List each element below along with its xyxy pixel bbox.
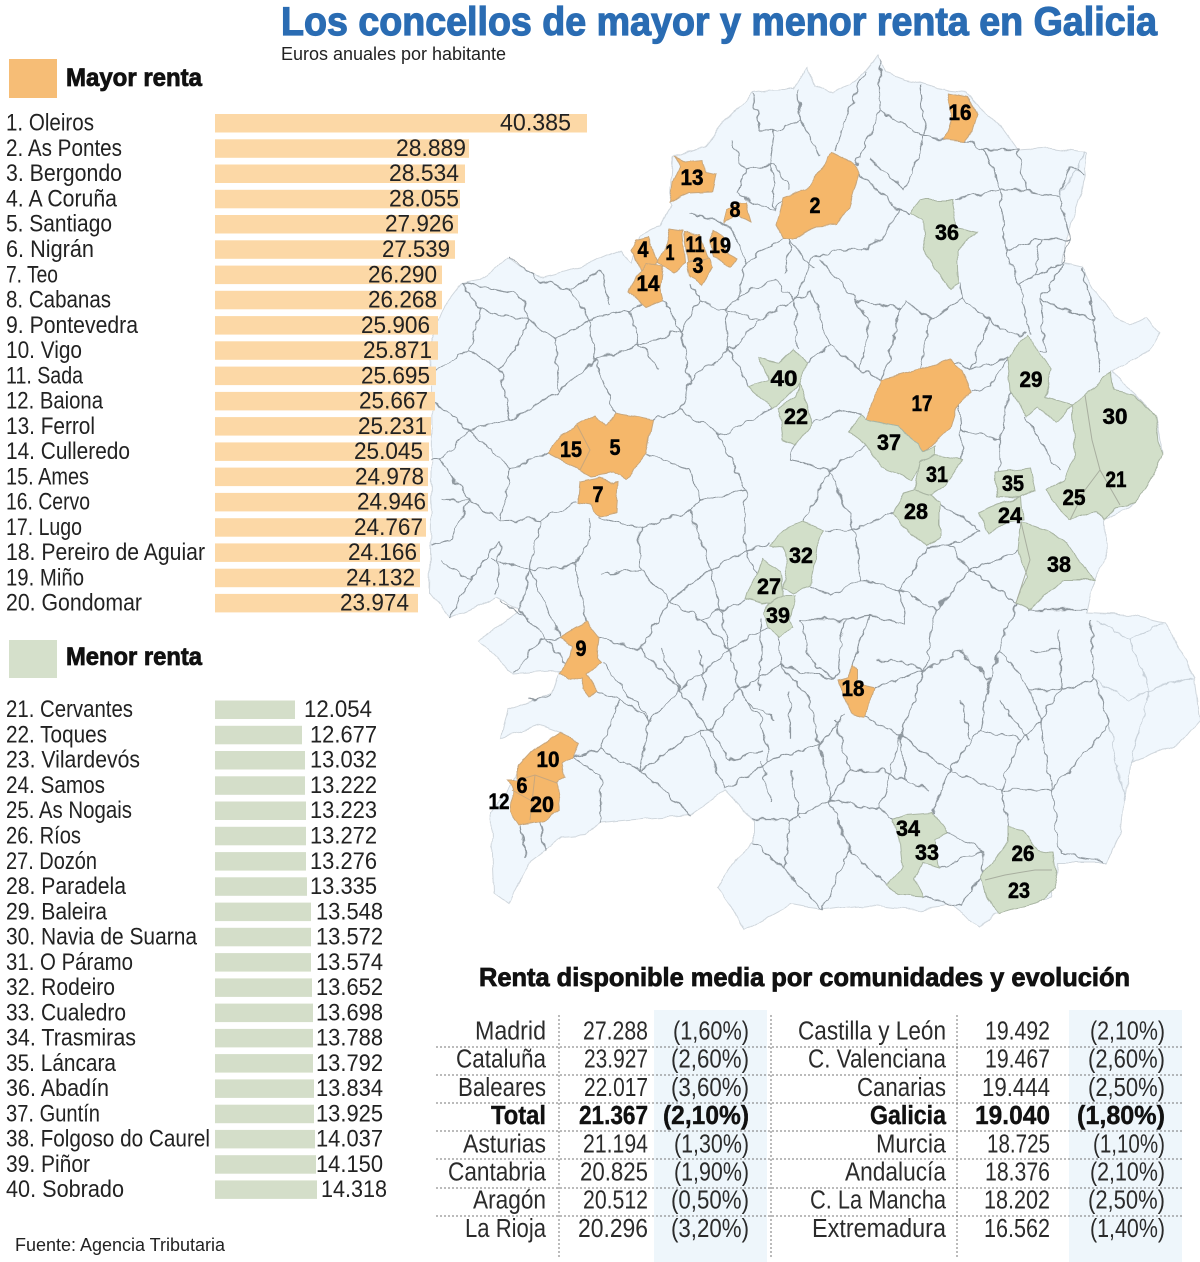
table right column: 18.376 [985, 1158, 1050, 1186]
map of Galicia [430, 55, 1200, 930]
bar chart: lowest income: 38. Folgoso do Caurel [6, 1126, 210, 1153]
table left column [448, 1018, 749, 1243]
bar chart: highest income: 18. Pereiro de Aguiar [6, 539, 205, 566]
map number labels: 27 [757, 574, 781, 599]
map number labels: 26 [1012, 841, 1034, 866]
bar chart: lowest income: 13.548 [316, 898, 383, 925]
map number labels: 21 [1106, 467, 1126, 492]
bar chart: lowest income: 13.792 [316, 1050, 383, 1077]
table left column: Cantabria [448, 1158, 547, 1186]
bar chart: highest income: 25.871 [363, 337, 432, 364]
bar chart: lowest income: 13.574 [316, 949, 383, 976]
bar chart: lowest income: 13.222 [310, 772, 377, 799]
municipality 17 [866, 360, 972, 453]
bar chart: lowest income: 37. Guntín [6, 1100, 100, 1127]
bar chart: highest income: 26.290 [368, 261, 437, 288]
bar chart: highest income: 9. Pontevedra [6, 312, 138, 339]
table right column: (2,10%) [1090, 1018, 1165, 1046]
municipalities 10, 6, 12 and 20 [507, 733, 579, 825]
municipality 38 [1016, 522, 1094, 610]
map number labels: 5 [610, 435, 620, 460]
map number labels: 39 [766, 603, 790, 628]
municipality 22 [778, 383, 812, 445]
map number labels: 28 [904, 499, 928, 524]
bar chart: highest income: 24.946 [357, 489, 426, 516]
map number labels: 38 [1047, 552, 1071, 577]
map number labels [488, 100, 1128, 903]
table right column: 19.467 [985, 1046, 1050, 1074]
bar chart: highest income: 25.695 [361, 362, 430, 389]
map number labels: 29 [1020, 367, 1042, 392]
table right column: C. Valenciana [808, 1046, 947, 1074]
bar chart: lowest income: 13.032 [310, 747, 377, 774]
table right column: (1,80%) [1077, 1102, 1165, 1130]
table left column: (1,60%) [673, 1018, 749, 1046]
legend: menor renta: Menor renta [66, 643, 203, 671]
subtitle: Euros anuales por habitante [281, 43, 506, 64]
table left column: 20.825 [580, 1158, 648, 1186]
municipality 28 [893, 490, 940, 547]
table right column: 16.562 [984, 1215, 1050, 1243]
table left column: Cataluña [456, 1046, 547, 1074]
bar chart: lowest income: 12.054 [304, 696, 372, 723]
table heading: Renta disponible media por comunidades y evolución [479, 962, 1130, 992]
title: Los concellos de mayor y menor renta en Galicia [281, 0, 1158, 44]
municipalities 26 and 23 [981, 827, 1057, 913]
table right column: (2,10%) [1090, 1158, 1165, 1186]
bar chart: lowest income: 34. Trasmiras [6, 1025, 136, 1052]
bar chart: highest income: 24.767 [354, 514, 423, 541]
panel: mayor renta [6, 59, 587, 617]
municipality 36 [910, 200, 977, 288]
bar chart: highest income: 27.539 [382, 236, 450, 263]
map number labels: 36 [935, 220, 959, 245]
map number labels: 8 [730, 197, 740, 222]
municipality 32 [771, 522, 825, 593]
bar chart: highest income: 25.667 [359, 388, 428, 415]
bar chart: lowest income: 13.925 [316, 1100, 383, 1127]
bar chart: lowest income: 39. Piñor [6, 1151, 90, 1178]
table left column: (1,30%) [674, 1130, 749, 1158]
municipality 27 [746, 560, 783, 603]
map number labels: 1 [666, 240, 674, 265]
table shaded columns [654, 1010, 1182, 1262]
highest income municipalities (orange) [507, 93, 977, 825]
map number labels: 17 [912, 391, 932, 416]
map number labels: 30 [1102, 404, 1128, 429]
bar chart: lowest income: 25. As Nogais [6, 797, 132, 824]
bar chart: highest income: 23.974 [340, 590, 409, 617]
bar chart: lowest income: 30. Navia de Suarna [6, 923, 197, 950]
bar chart: highest income: 7. Teo [6, 261, 58, 288]
table right column: 18.202 [984, 1187, 1050, 1215]
bar chart: highest income: 28.055 [389, 186, 459, 213]
map number labels: 12 [488, 789, 510, 814]
bar chart: highest income: 12. Baiona [6, 388, 103, 415]
map number labels: 19 [709, 233, 731, 258]
bar chart: lowest income: 36. Abadín [6, 1075, 109, 1102]
map number labels: 4 [638, 237, 649, 262]
map number labels: 32 [789, 543, 813, 568]
map number labels: 34 [896, 816, 921, 841]
table right column: Castilla y León [798, 1018, 946, 1046]
bar chart: highest income: 2. As Pontes [6, 135, 122, 162]
bar chart: highest income: 14. Culleredo [6, 438, 130, 465]
bar chart: highest income: 15. Ames [6, 463, 89, 490]
map number labels: 25 [1062, 485, 1086, 510]
map number labels: 40 [770, 366, 798, 391]
municipality 40 [749, 348, 806, 408]
legend: mayor renta: Mayor renta [66, 64, 203, 92]
table left column: (0,50%) [671, 1187, 749, 1215]
bar chart: lowest income: 33. Cualedro [6, 999, 126, 1026]
table left column: (1,90%) [674, 1158, 749, 1186]
bar chart: highest income: 28.889 [396, 135, 466, 162]
table right column: Canarias [857, 1074, 946, 1102]
municipalities 30, 21 and 25 [1045, 373, 1163, 520]
map number labels: 35 [1002, 471, 1024, 496]
bar chart: lowest income: 29. Baleira [6, 898, 107, 925]
bar chart: lowest income: 13.652 [316, 974, 383, 1001]
bar chart: highest income: 24.166 [348, 539, 417, 566]
municipality 8 [724, 203, 751, 223]
table left column: (2,10%) [663, 1102, 749, 1130]
municipality 24 [979, 498, 1023, 533]
table right column: (2,50%) [1088, 1187, 1165, 1215]
municipality 3 [687, 258, 712, 285]
bar chart: lowest income: 13.276 [310, 848, 377, 875]
bar chart: highest income: 19. Miño [6, 564, 84, 591]
municipality 4 [631, 237, 660, 272]
far-east light borders [1060, 153, 1195, 800]
table left column: 22.017 [584, 1074, 648, 1102]
table right column [798, 1018, 1165, 1243]
bar chart: highest income: 28.534 [389, 160, 459, 187]
municipality 11 [684, 232, 708, 262]
table right column: Andalucía [845, 1158, 947, 1186]
panel: menor renta [6, 640, 387, 1203]
map number labels: 11 [686, 232, 704, 257]
table left column: 20.512 [583, 1187, 648, 1215]
bar chart: highest income: 20. Gondomar [6, 590, 142, 617]
bar chart: highest income: 10. Vigo [6, 337, 82, 364]
table left column: Baleares [458, 1074, 546, 1102]
table right column: (1,10%) [1093, 1130, 1165, 1158]
map number labels: 15 [560, 437, 582, 462]
bar chart: lowest income: 13.223 [310, 797, 377, 824]
municipality 39 [763, 595, 795, 637]
bar chart: lowest income: 13.572 [316, 923, 383, 950]
municipality 31 [915, 455, 962, 495]
table right column: 19.492 [985, 1018, 1050, 1046]
municipality 19 [710, 230, 736, 267]
bar chart: lowest income: 13.698 [316, 999, 383, 1026]
bar chart: lowest income [6, 696, 387, 1203]
bar chart: highest income: 13. Ferrol [6, 413, 95, 440]
bar chart: lowest income: 28. Paradela [6, 873, 126, 900]
bar chart: highest income: 5. Santiago [6, 211, 112, 238]
bar chart: lowest income: 32. Rodeiro [6, 974, 115, 1001]
map number labels: 24 [998, 503, 1023, 528]
table left column: Madrid [475, 1018, 546, 1046]
land outline [430, 55, 1200, 930]
map number labels: 22 [784, 404, 808, 429]
map number labels: 2 [810, 193, 820, 218]
table right column: 19.444 [982, 1074, 1050, 1102]
bar chart: highest income: 11. Sada [6, 362, 83, 389]
municipality 37 [849, 415, 935, 480]
table dotted rules [436, 1015, 1182, 1258]
bar chart: lowest income: 40. Sobrado [6, 1176, 124, 1203]
table left column: 21.367 [579, 1102, 648, 1130]
bar chart: highest income: 27.926 [385, 211, 454, 238]
source note: Fuente: Agencia Tributaria [15, 1235, 226, 1255]
map number labels: 13 [680, 165, 704, 190]
bar chart: lowest income: 26. Ríos [6, 822, 81, 849]
bar chart: lowest income: 31. O Páramo [6, 949, 133, 976]
municipality 18 [839, 665, 874, 717]
table right column: (2,50%) [1088, 1074, 1165, 1102]
bar chart: highest income: 3. Bergondo [6, 160, 122, 187]
table right column: C. La Mancha [810, 1187, 947, 1215]
table right column: (1,40%) [1090, 1215, 1165, 1243]
table left column: (3,60%) [671, 1074, 749, 1102]
bar chart: lowest income: 12.677 [310, 721, 377, 748]
bar chart: highest income: 25.045 [354, 438, 423, 465]
table left column: (2,60%) [671, 1046, 749, 1074]
bar chart: lowest income: 27. Dozón [6, 848, 97, 875]
bar chart: lowest income: 24. Samos [6, 772, 105, 799]
municipality 9 [560, 622, 602, 697]
municipality 7 [578, 478, 618, 517]
table left column: Total [491, 1102, 546, 1130]
table left column: 27.288 [583, 1018, 648, 1046]
map number labels: 18 [842, 676, 864, 701]
table right column: 19.040 [975, 1102, 1050, 1130]
lowest income municipalities (green) [746, 200, 1163, 913]
table right column: 18.725 [987, 1130, 1050, 1158]
map number labels: 6 [516, 773, 528, 798]
municipality 1 [658, 228, 685, 272]
bar chart: highest income: 25.906 [361, 312, 430, 339]
inner borders of highlighted groups [985, 395, 1120, 880]
bar chart: highest income: 24.978 [355, 463, 424, 490]
map number labels: 3 [692, 253, 704, 278]
table left column: (3,20%) [671, 1215, 749, 1243]
table right column: Extremadura [812, 1215, 947, 1243]
bar chart: highest income: 25.231 [358, 413, 427, 440]
municipality 16 [945, 93, 977, 142]
table left column: La Rioja [465, 1215, 547, 1243]
bar chart: highest income: 24.132 [346, 564, 415, 591]
bar chart: lowest income: 14.150 [316, 1151, 383, 1178]
bar chart: highest income: 40.385 [500, 110, 571, 137]
map number labels: 33 [915, 840, 939, 865]
table left column: Asturias [463, 1130, 546, 1158]
bar chart: highest income: 26.268 [368, 286, 437, 313]
bar chart: lowest income: 13.335 [310, 873, 377, 900]
table left column: 21.194 [583, 1130, 648, 1158]
bar chart: highest income: 1. Oleiros [6, 110, 94, 137]
bar chart: lowest income: 13.272 [310, 822, 377, 849]
bar chart: highest income: 8. Cabanas [6, 286, 111, 313]
bar chart: highest income: 6. Nigrán [6, 236, 94, 263]
bar chart: highest income: 4. A Coruña [6, 186, 117, 213]
municipality 35 [995, 468, 1035, 498]
legend: mayor renta [9, 59, 203, 98]
bar chart: lowest income: 35. Láncara [6, 1050, 116, 1077]
map number labels: 37 [877, 430, 901, 455]
bar chart: lowest income: 13.788 [316, 1025, 383, 1052]
municipality 2 [776, 153, 859, 238]
legend: menor renta [9, 640, 203, 678]
map number labels: 31 [926, 462, 948, 487]
municipal borders [430, 60, 1110, 910]
table right column: (2,60%) [1088, 1046, 1165, 1074]
table left column: Aragón [473, 1187, 546, 1215]
municipalities 15 and 5 [548, 413, 653, 480]
municipality 13 [670, 157, 716, 202]
bar chart: highest income: 17. Lugo [6, 514, 82, 541]
map number labels: 7 [592, 482, 604, 507]
bar chart: lowest income: 14.037 [316, 1126, 383, 1153]
bar chart: lowest income: 22. Toques [6, 721, 107, 748]
municipality 29 [1008, 335, 1072, 422]
table right column: Galicia [870, 1102, 947, 1130]
panel: renta por comunidades [436, 962, 1182, 1262]
map number labels: 14 [636, 271, 660, 296]
bar chart: highest income [6, 110, 587, 617]
bar chart: lowest income: 23. Vilardevós [6, 747, 140, 774]
table right column: Murcia [876, 1130, 947, 1158]
map number labels: 16 [948, 100, 972, 125]
map number labels: 20 [530, 792, 554, 817]
bar chart: highest income: 16. Cervo [6, 489, 90, 516]
bar chart: lowest income: 13.834 [316, 1075, 383, 1102]
map number labels: 10 [536, 747, 560, 772]
bar chart: lowest income: 21. Cervantes [6, 696, 133, 723]
municipalities 34 and 33 [886, 813, 947, 897]
map number labels: 23 [1008, 878, 1030, 903]
table left column: 20.296 [578, 1215, 648, 1243]
municipality 14 [629, 263, 663, 307]
map number labels: 9 [576, 636, 586, 661]
table left column: 23.927 [584, 1046, 648, 1074]
bar chart: lowest income: 14.318 [321, 1176, 387, 1203]
